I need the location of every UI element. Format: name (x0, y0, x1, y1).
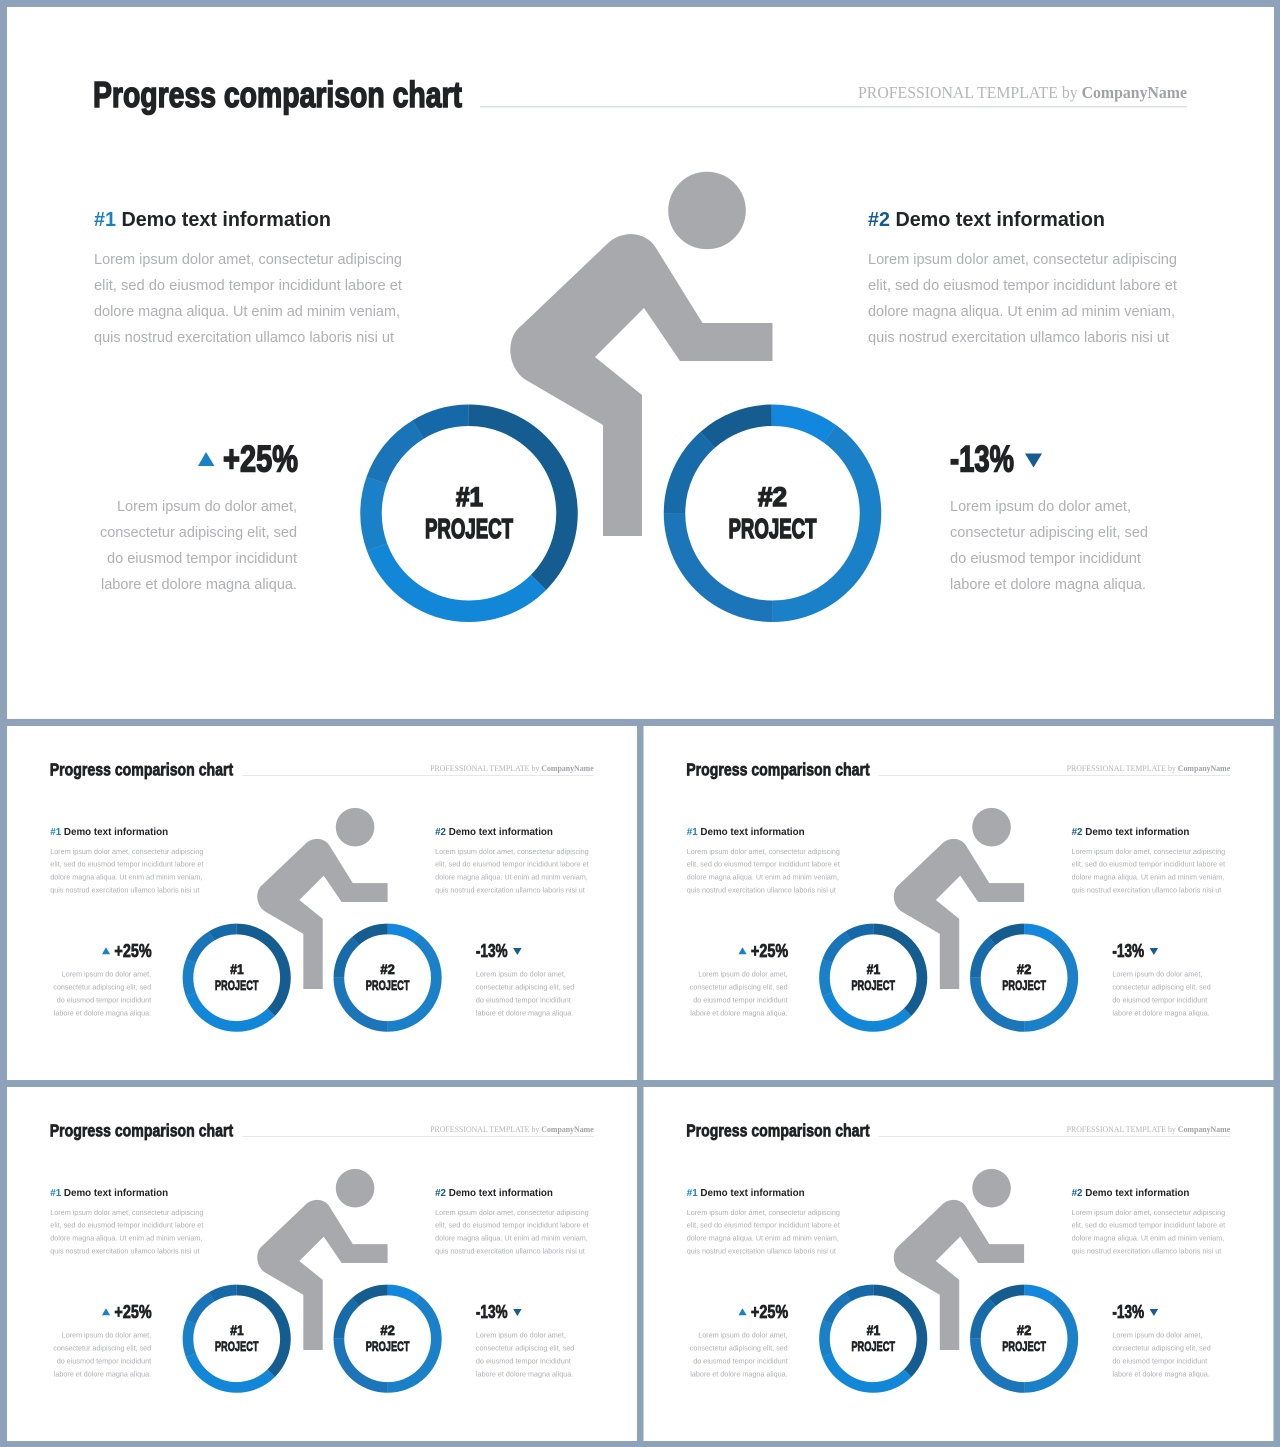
panel: thumbnail bottom right: Lorem ipsum do dolor amet, (1112, 1331, 1202, 1340)
text block: project 1 (94, 209, 403, 346)
panel: thumbnail bottom right: #1 (867, 1323, 881, 1338)
panel: thumbnail top left: elit, sed do eiusmod tempor incididunt labore et (435, 860, 590, 869)
stat: plus 25 percent (198, 438, 298, 480)
panel: thumbnail top left: -13% (476, 940, 508, 961)
ring label: project 1: #1 (456, 482, 483, 512)
panel: thumbnail bottom right: Lorem ipsum do dolor amet, (698, 1331, 788, 1340)
panel: thumbnail top left: Lorem ipsum dolor amet, consectetur adipiscing (50, 847, 203, 856)
panel: thumbnail top left (7, 726, 637, 1080)
panel: thumbnail top right: do eiusmod tempor incididunt (693, 995, 789, 1004)
ring label: project 2: PROJECT (728, 513, 816, 544)
panel: thumbnail top right: Progress comparison chart (686, 760, 870, 780)
panel: thumbnail bottom left: PROFESSIONAL TEMPLATE by CompanyName (430, 1124, 594, 1134)
stat: plus 25 percent: +25% (223, 438, 298, 480)
panel: thumbnail bottom left: quis nostrud exercitation ullamco laboris nisi ut (50, 1247, 200, 1256)
panel: thumbnail top right: PROFESSIONAL TEMPLATE by CompanyName (1067, 763, 1230, 773)
title: Progress comparison chart (93, 74, 462, 115)
panel: thumbnail bottom right: dolore magna aliqua. Ut enim ad minim veniam, (687, 1234, 839, 1243)
stat text: project 2: do eiusmod tempor incididunt (950, 550, 1142, 567)
panel: thumbnail top left: #1 Demo text information (50, 827, 168, 838)
panel: thumbnail bottom left: elit, sed do eiusmod tempor incididunt labore et (435, 1221, 590, 1230)
stat text: project 2: labore et dolore magna aliqua. (950, 576, 1146, 593)
panel: thumbnail bottom right: consectetur adipiscing elit, sed (1112, 1344, 1211, 1353)
panel: thumbnail top left: labore et dolore magna aliqua. (476, 1008, 573, 1017)
panel: thumbnail top right: Lorem ipsum do dolor amet, (698, 970, 788, 979)
stat text: project 2 (950, 498, 1148, 593)
panel: thumbnail bottom right: Lorem ipsum dolor amet, consectetur adipiscing (687, 1208, 840, 1217)
text block: project 2 (868, 209, 1178, 346)
panel: thumbnail bottom left: Progress comparison chart (50, 1121, 233, 1141)
panel: thumbnail bottom left: do eiusmod tempor incididunt (57, 1356, 152, 1365)
panel: thumbnail bottom left: +25% (114, 1301, 152, 1322)
panel: thumbnail top left: consectetur adipiscing elit, sed (476, 983, 574, 992)
panel: thumbnail top right: PROJECT (1002, 977, 1046, 993)
panel: thumbnail bottom right: quis nostrud exercitation ullamco laboris nisi ut (1072, 1247, 1222, 1256)
panel: thumbnail top left: PROJECT (215, 977, 259, 993)
panel: thumbnail top right: #2 (1017, 962, 1031, 977)
panel: thumbnail top right: PROJECT (851, 977, 895, 993)
stat text: project 1: labore et dolore magna aliqua. (101, 576, 297, 593)
stat: minus 13 percent: -13% (950, 438, 1014, 480)
panel: thumbnail bottom left: Lorem ipsum do dolor amet, (476, 1331, 566, 1340)
panel: thumbnail bottom right: quis nostrud exercitation ullamco laboris nisi ut (687, 1247, 837, 1256)
panel: thumbnail bottom left (7, 1087, 637, 1441)
panel: thumbnail bottom right: PROJECT (851, 1338, 895, 1354)
panel: thumbnail top left: PROJECT (366, 977, 410, 993)
panel: thumbnail top left: labore et dolore magna aliqua. (54, 1008, 151, 1017)
panel: thumbnail top right: #1 Demo text information (687, 827, 805, 838)
panel: thumbnail top right: Lorem ipsum dolor amet, consectetur adipiscing (687, 847, 840, 856)
panel: thumbnail bottom right: PROFESSIONAL TEMPLATE by CompanyName (1067, 1124, 1230, 1134)
ring label: project 2: #2 (758, 482, 787, 512)
text block: project 2: #2 Demo text information (868, 209, 1105, 231)
panel: thumbnail top right: do eiusmod tempor incididunt (1112, 995, 1208, 1004)
text block: project 1: quis nostrud exercitation ullamco laboris nisi ut (94, 329, 395, 346)
panel: thumbnail bottom right: PROJECT (1002, 1338, 1046, 1354)
panel: thumbnail top right: Lorem ipsum dolor amet, consectetur adipiscing (1072, 847, 1225, 856)
panel: thumbnail bottom right: do eiusmod tempor incididunt (693, 1356, 789, 1365)
panel: thumbnail top left: consectetur adipiscing elit, sed (53, 983, 151, 992)
panel: thumbnail top right (644, 726, 1273, 1080)
panel: thumbnail top right: Lorem ipsum do dolor amet, (1112, 970, 1202, 979)
panel: thumbnail top right: +25% (751, 940, 788, 961)
panel: thumbnail top left: #1 (230, 962, 244, 977)
panel: thumbnail top left: Lorem ipsum dolor amet, consectetur adipiscing (435, 847, 589, 856)
panel: thumbnail bottom right: labore et dolore magna aliqua. (690, 1369, 788, 1378)
panel: thumbnail top left: do eiusmod tempor incididunt (57, 995, 152, 1004)
panel: thumbnail bottom right: elit, sed do eiusmod tempor incididunt labore et (687, 1221, 841, 1230)
panel: thumbnail top right: quis nostrud exercitation ullamco laboris nisi ut (1072, 886, 1222, 895)
panel: thumbnail top right: labore et dolore magna aliqua. (690, 1008, 788, 1017)
stat text: project 1 (100, 498, 298, 593)
panel: thumbnail bottom left: #1 (230, 1323, 244, 1338)
text block: project 1: elit, sed do eiusmod tempor incididunt labore et (94, 277, 403, 294)
panel: thumbnail top right: dolore magna aliqua. Ut enim ad minim veniam, (1072, 873, 1224, 882)
panel: thumbnail bottom left: Lorem ipsum dolor amet, consectetur adipiscing (435, 1208, 589, 1217)
panel: thumbnail top right: elit, sed do eiusmod tempor incididunt labore et (1072, 860, 1226, 869)
panel: thumbnail top left: do eiusmod tempor incididunt (476, 995, 572, 1004)
panel: thumbnail top right: dolore magna aliqua. Ut enim ad minim veniam, (687, 873, 839, 882)
header tagline: PROFESSIONAL TEMPLATE by CompanyName (858, 83, 1187, 102)
panel: thumbnail bottom left: elit, sed do eiusmod tempor incididunt labore et (50, 1221, 204, 1230)
panel: thumbnail top left: quis nostrud exercitation ullamco laboris nisi ut (50, 886, 200, 895)
panel: thumbnail top right: labore et dolore magna aliqua. (1112, 1008, 1210, 1017)
panel: thumbnail bottom left: #1 Demo text information (50, 1188, 168, 1199)
panel: thumbnail bottom right: Lorem ipsum dolor amet, consectetur adipiscing (1072, 1208, 1225, 1217)
panel: thumbnail bottom right: consectetur adipiscing elit, sed (690, 1344, 788, 1353)
panel: thumbnail bottom right: Progress comparison chart (686, 1121, 870, 1141)
panel: thumbnail top right: elit, sed do eiusmod tempor incididunt labore et (687, 860, 841, 869)
panel: thumbnail top right: consectetur adipiscing elit, sed (1112, 983, 1211, 992)
panel: thumbnail top right: #1 (867, 962, 881, 977)
ring label: project 2 (728, 482, 816, 544)
panel: thumbnail bottom left: Lorem ipsum dolor amet, consectetur adipiscing (50, 1208, 203, 1217)
panel: thumbnail bottom right (644, 1087, 1273, 1441)
text block: project 2: elit, sed do eiusmod tempor incididunt labore et (868, 277, 1178, 294)
stat text: project 2: consectetur adipiscing elit, sed (950, 524, 1148, 541)
wheel ring: project 1 (371, 415, 567, 611)
panel: thumbnail bottom left: #2 (380, 1323, 395, 1338)
text block: project 2: Lorem ipsum dolor amet, consectetur adipiscing (868, 251, 1177, 268)
panel: thumbnail top left: Progress comparison chart (50, 760, 233, 780)
panel: thumbnail bottom right: labore et dolore magna aliqua. (1112, 1369, 1210, 1378)
wheel ring: project 2 (674, 415, 870, 611)
panel: thumbnail bottom right: dolore magna aliqua. Ut enim ad minim veniam, (1072, 1234, 1224, 1243)
panel: thumbnail top left: dolore magna aliqua. Ut enim ad minim veniam, (435, 873, 588, 882)
panel: thumbnail bottom left: consectetur adipiscing elit, sed (53, 1344, 151, 1353)
panel: thumbnail bottom right: #2 Demo text information (1072, 1188, 1189, 1199)
panel: thumbnail bottom left: PROJECT (366, 1338, 410, 1354)
text block: project 1: dolore magna aliqua. Ut enim ad minim veniam, (94, 303, 400, 320)
panel: thumbnail top right: consectetur adipiscing elit, sed (690, 983, 788, 992)
panel: thumbnail top left: Lorem ipsum do dolor amet, (476, 970, 566, 979)
panel: thumbnail top right: -13% (1112, 940, 1144, 961)
panel: thumbnail bottom right: elit, sed do eiusmod tempor incididunt labore et (1072, 1221, 1226, 1230)
panel: thumbnail bottom right: do eiusmod tempor incididunt (1112, 1356, 1208, 1365)
panel: thumbnail bottom left: dolore magna aliqua. Ut enim ad minim veniam, (435, 1234, 588, 1243)
panel: thumbnail bottom left: #2 Demo text information (435, 1188, 553, 1199)
stat text: project 1: consectetur adipiscing elit, sed (100, 524, 297, 541)
text block: project 2: dolore magna aliqua. Ut enim ad minim veniam, (868, 303, 1175, 320)
panel: thumbnail bottom left: -13% (476, 1301, 508, 1322)
panel: thumbnail top left: PROFESSIONAL TEMPLATE by CompanyName (430, 763, 594, 773)
ring label: project 1 (425, 482, 513, 544)
panel: thumbnail bottom left: labore et dolore magna aliqua. (476, 1369, 573, 1378)
panel: thumbnail top left: #2 Demo text information (435, 827, 553, 838)
ring label: project 1: PROJECT (425, 513, 513, 544)
panel: thumbnail bottom left: quis nostrud exercitation ullamco laboris nisi ut (435, 1247, 586, 1256)
panel: thumbnail bottom right: #1 Demo text information (687, 1188, 805, 1199)
panel: thumbnail top right: quis nostrud exercitation ullamco laboris nisi ut (687, 886, 837, 895)
panel: thumbnail top left: Lorem ipsum do dolor amet, (62, 970, 151, 979)
stat text: project 1: do eiusmod tempor incididunt (107, 550, 298, 567)
panel: thumbnail bottom left: dolore magna aliqua. Ut enim ad minim veniam, (50, 1234, 202, 1243)
panel: thumbnail bottom right: #2 (1017, 1323, 1031, 1338)
text block: project 2: quis nostrud exercitation ullamco laboris nisi ut (868, 329, 1170, 346)
panel: thumbnail bottom right: +25% (751, 1301, 788, 1322)
panel: main slide (7, 7, 1274, 719)
panel: thumbnail bottom left: consectetur adipiscing elit, sed (476, 1344, 574, 1353)
panel: thumbnail bottom right: -13% (1112, 1301, 1144, 1322)
panel: thumbnail bottom left: do eiusmod tempor incididunt (476, 1356, 572, 1365)
text block: project 1: Lorem ipsum dolor amet, consectetur adipiscing (94, 251, 402, 268)
icon: cyclist figure (510, 172, 772, 536)
panel: thumbnail top left: elit, sed do eiusmod tempor incididunt labore et (50, 860, 204, 869)
panel: thumbnail top left: #2 (380, 962, 395, 977)
panel: thumbnail bottom left: PROJECT (215, 1338, 259, 1354)
panel: thumbnail top left: +25% (114, 940, 152, 961)
text block: project 1: #1 Demo text information (94, 209, 331, 231)
panel: thumbnail top left: quis nostrud exercitation ullamco laboris nisi ut (435, 886, 586, 895)
panel: thumbnail top left: dolore magna aliqua. Ut enim ad minim veniam, (50, 873, 202, 882)
stat text: project 1: Lorem ipsum do dolor amet, (117, 498, 297, 515)
panel: thumbnail bottom left: Lorem ipsum do dolor amet, (62, 1331, 151, 1340)
panel: thumbnail top right: #2 Demo text information (1072, 827, 1189, 838)
panel: thumbnail bottom left: labore et dolore magna aliqua. (54, 1369, 151, 1378)
stat text: project 2: Lorem ipsum do dolor amet, (950, 498, 1131, 515)
